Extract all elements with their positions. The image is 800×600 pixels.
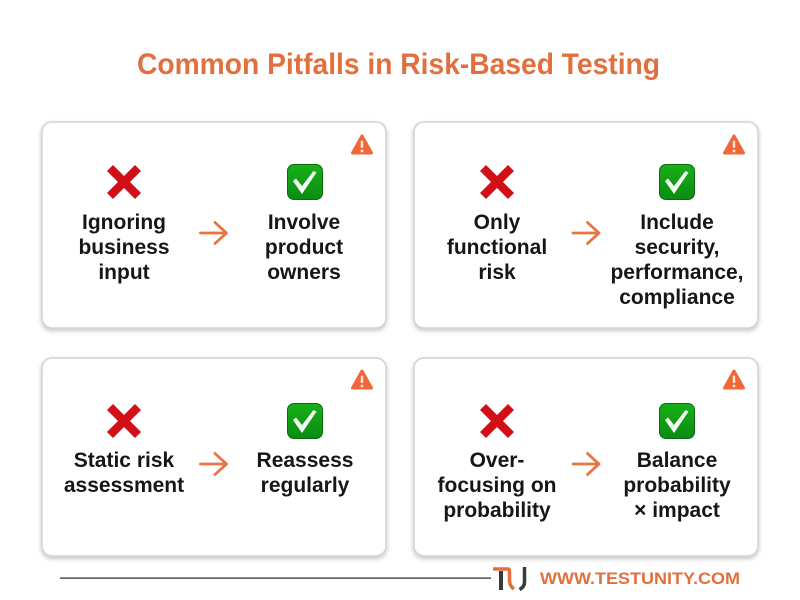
panel: static risk assessment	[42, 358, 386, 556]
fix text: regularly	[261, 474, 350, 497]
fix text: × impact	[634, 499, 720, 522]
icon: cross	[483, 168, 511, 196]
arrow	[200, 222, 226, 244]
icon: check	[660, 404, 694, 438]
icon: warning	[724, 371, 744, 388]
fix text: probability	[623, 474, 731, 497]
fix text: product	[265, 236, 343, 259]
icon: check	[288, 164, 322, 200]
pitfall text: Only	[474, 211, 520, 234]
icon: cross	[110, 407, 138, 435]
fix text: owners	[267, 261, 341, 284]
arrow	[200, 454, 226, 474]
pitfall text: business	[78, 236, 170, 259]
pitfall text: assessment	[64, 474, 184, 497]
pitfall text: Ignoring	[82, 211, 166, 234]
icon: cross	[110, 168, 138, 196]
icon: check	[660, 164, 694, 200]
fix text: compliance	[619, 286, 735, 309]
pitfall text: risk	[478, 261, 516, 284]
icon: warning	[352, 136, 372, 153]
arrow	[573, 454, 599, 474]
pitfall text: input	[98, 261, 150, 284]
logo	[493, 567, 524, 590]
icon: cross	[483, 407, 511, 435]
pitfall text: focusing on	[438, 474, 556, 497]
pitfall text: Over-	[470, 449, 524, 472]
fix text: Involve	[268, 211, 340, 234]
panel: over-focusing on probability	[414, 358, 758, 556]
fix text: performance,	[610, 261, 744, 284]
title: Common Pitfalls in Risk-Based Testing	[137, 48, 660, 81]
pitfall text: probability	[443, 499, 551, 522]
fix text: Reassess	[257, 449, 353, 472]
website url: WWW.TESTUNITY.COM	[540, 569, 740, 588]
panel: only functional risk	[414, 122, 758, 328]
icon: warning	[352, 371, 372, 388]
icon: warning	[724, 136, 744, 153]
panel: ignoring business input	[42, 122, 386, 328]
footer rule	[60, 578, 491, 579]
fix text: Include	[640, 211, 714, 234]
arrow	[573, 222, 599, 244]
pitfall text: functional	[447, 236, 547, 259]
pitfall text: Static risk	[74, 449, 174, 472]
icon: check	[288, 404, 322, 438]
fix text: security,	[635, 236, 719, 259]
fix text: Balance	[637, 449, 717, 472]
